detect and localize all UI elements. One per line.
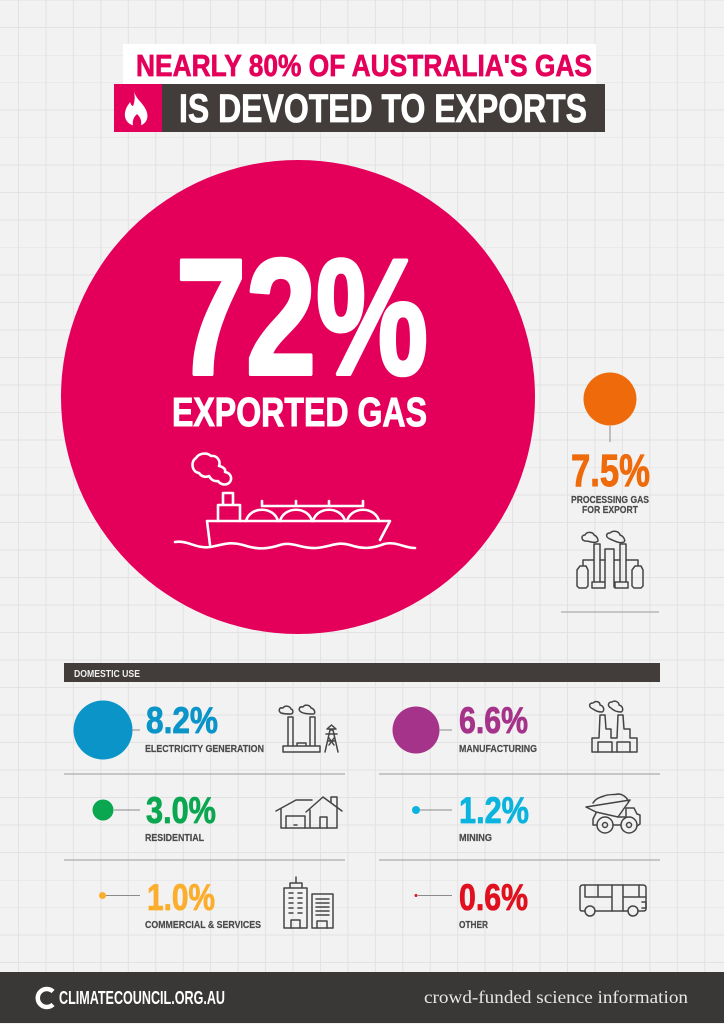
row: residential: 3.0% bbox=[146, 789, 216, 831]
row: other: OTHER bbox=[459, 920, 489, 931]
icon: power station bbox=[279, 705, 338, 752]
row: manufacturing bbox=[392, 699, 637, 755]
row: electricity generation: 8.2% bbox=[146, 699, 218, 741]
label: PROCESSING GAS bbox=[571, 495, 649, 506]
footer bar bbox=[0, 972, 724, 1023]
row: manufacturing: MANUFACTURING bbox=[459, 744, 537, 755]
tagline: crowd-funded science information bbox=[424, 987, 688, 1007]
row: other bbox=[414, 876, 646, 931]
icon: house bbox=[276, 797, 342, 828]
icon: office buildings bbox=[284, 877, 333, 928]
heading bar bbox=[64, 663, 660, 682]
title bbox=[114, 44, 605, 132]
label bbox=[571, 495, 649, 516]
panel: exported gas circle bbox=[61, 160, 535, 634]
heading bar: DOMESTIC USE bbox=[74, 668, 140, 680]
row: commercial and services bbox=[99, 876, 333, 931]
title line 1: NEARLY 80% OF AUSTRALIA'S GAS bbox=[136, 48, 592, 83]
label: FOR EXPORT bbox=[582, 505, 639, 516]
panel: processing gas for export bbox=[561, 372, 659, 612]
big number 72%: 72% bbox=[176, 225, 428, 409]
panel: domestic use bbox=[64, 663, 660, 931]
row: electricity generation: ELECTRICITY GENERATION bbox=[145, 744, 264, 755]
row: residential: RESIDENTIAL bbox=[145, 833, 204, 844]
logo: climate council bbox=[38, 987, 225, 1008]
label exported gas: EXPORTED GAS bbox=[172, 389, 427, 435]
icon: bus bbox=[580, 885, 646, 916]
icon: gas tanker ship bbox=[175, 454, 415, 548]
row: mining bbox=[412, 789, 640, 844]
row: manufacturing: 6.6% bbox=[459, 699, 528, 741]
row: mining: MINING bbox=[459, 833, 492, 844]
row: other: 0.6% bbox=[459, 876, 528, 918]
row: residential bbox=[92, 789, 342, 844]
icon: flame bbox=[114, 84, 162, 132]
logo: climate council: CLIMATECOUNCIL.ORG.AU bbox=[59, 987, 225, 1008]
percentage 7.5%: 7.5% bbox=[571, 445, 650, 496]
icon: processing plant bbox=[577, 531, 643, 588]
row: commercial and services: COMMERCIAL & SERVICES bbox=[145, 920, 261, 931]
row: electricity generation bbox=[74, 699, 338, 760]
row: commercial and services: 1.0% bbox=[147, 876, 215, 918]
title line 2: IS DEVOTED TO EXPORTS bbox=[179, 87, 587, 131]
proportional circle bbox=[584, 372, 636, 426]
icon: factory bbox=[590, 701, 637, 752]
icon: mining truck bbox=[586, 794, 640, 833]
row: mining: 1.2% bbox=[459, 789, 529, 831]
